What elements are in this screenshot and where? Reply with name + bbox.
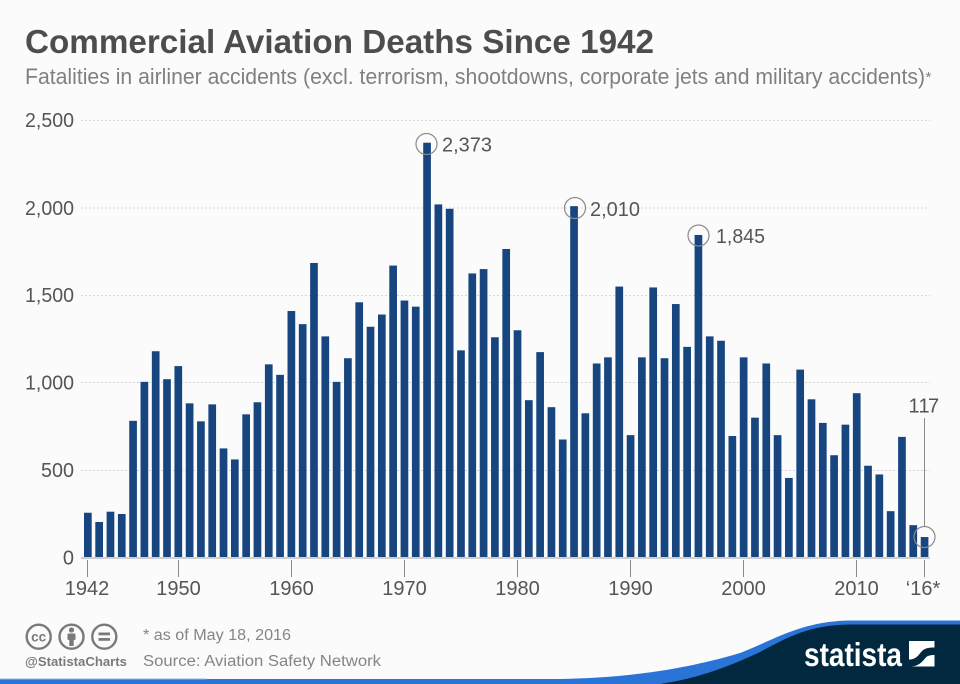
- x axis labels: ‘16*: [906, 578, 940, 600]
- x axis labels: 1980: [495, 578, 540, 600]
- x axis labels: 1942: [65, 578, 109, 600]
- callout: 2016 value: [908, 396, 939, 548]
- footnote: * as of May 18, 2016: [143, 627, 291, 644]
- x axis labels: 2000: [721, 578, 766, 600]
- bar chart: [84, 143, 928, 558]
- y axis labels: 0: [63, 548, 74, 570]
- icon: creative commons: [27, 625, 51, 649]
- x axis labels: 2010: [834, 578, 879, 600]
- y axis gridlines: [81, 120, 930, 470]
- x axis labels: 1960: [269, 578, 314, 600]
- icon: attribution: [60, 625, 84, 649]
- callout: 1972 peak: [416, 134, 492, 156]
- callout: 1972 peak: 2,373: [442, 134, 492, 156]
- callout: 1996 peak: 1,845: [716, 226, 765, 248]
- subtitle: Fatalities in airliner accidents (excl. terrorism, shootdowns, corporate jets and military accidents): [25, 64, 925, 89]
- source: Source: Aviation Safety Network: [143, 653, 381, 670]
- footer band: [0, 620, 960, 684]
- x axis labels: 1970: [382, 578, 427, 600]
- x axis labels: 1990: [608, 578, 653, 600]
- callout: 1985 peak: [564, 198, 640, 221]
- icon: creative commons: cc: [31, 630, 47, 644]
- y axis labels: [25, 110, 74, 570]
- y axis labels: 1,000: [25, 372, 74, 394]
- statista wordmark: statista: [804, 636, 903, 673]
- callout: 1985 peak: 2,010: [590, 199, 640, 221]
- x axis ticks: [88, 560, 924, 577]
- x axis baseline: [81, 557, 930, 559]
- y axis labels: 2,000: [25, 198, 74, 220]
- icon: statista logo: [909, 641, 934, 666]
- x axis labels: 1950: [156, 578, 201, 600]
- y axis labels: 500: [41, 460, 74, 482]
- callout: 2016 value: 117: [908, 396, 939, 418]
- callout: 1996 peak: [688, 225, 765, 248]
- icon: no derivatives: [92, 625, 116, 649]
- social handle: @StatistaCharts: [25, 654, 127, 669]
- y axis labels: 1,500: [25, 285, 74, 307]
- subtitle: *: [926, 69, 932, 86]
- x axis labels: [65, 578, 940, 600]
- y axis labels: 2,500: [25, 110, 74, 132]
- title: Commercial Aviation Deaths Since 1942: [25, 23, 654, 60]
